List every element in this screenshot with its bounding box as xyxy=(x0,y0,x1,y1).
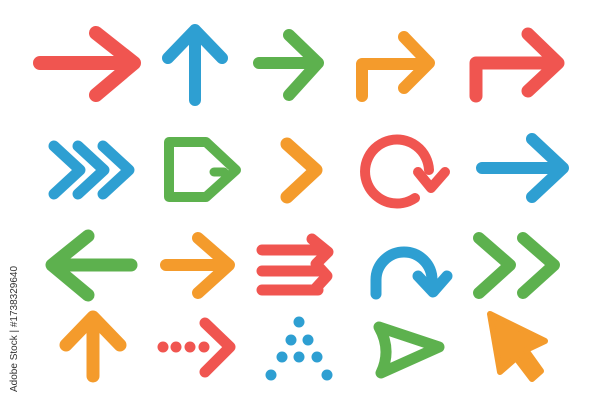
icon: blue triple chevron xyxy=(54,146,129,194)
icon: blue right arrow xyxy=(482,139,563,197)
icon: red turn arrow xyxy=(476,34,558,96)
icon: red dotted arrow xyxy=(158,323,230,372)
icon: orange up arrow xyxy=(66,317,120,376)
icon: blue up arrow xyxy=(168,30,222,100)
icon: red right arrow xyxy=(40,33,134,95)
icon: orange right arrow xyxy=(166,238,229,293)
icon: red triple-line arrow xyxy=(262,239,328,290)
credit text: Adobe Stock | #1738329640 xyxy=(9,266,20,392)
icon: green double chevron xyxy=(479,238,554,293)
icon: red circular arrow xyxy=(365,140,445,204)
icon: green left arrow xyxy=(52,236,131,295)
icon: orange turn arrow xyxy=(362,37,429,96)
icon: green play triangle xyxy=(379,327,439,373)
icon: orange chevron xyxy=(287,144,316,197)
icon: green tag xyxy=(169,142,236,197)
icon: green right arrow xyxy=(259,35,318,95)
icon: blue dot triangle xyxy=(266,316,332,380)
icon: blue U-turn arrow xyxy=(376,252,447,294)
icon: orange cursor xyxy=(490,314,545,379)
